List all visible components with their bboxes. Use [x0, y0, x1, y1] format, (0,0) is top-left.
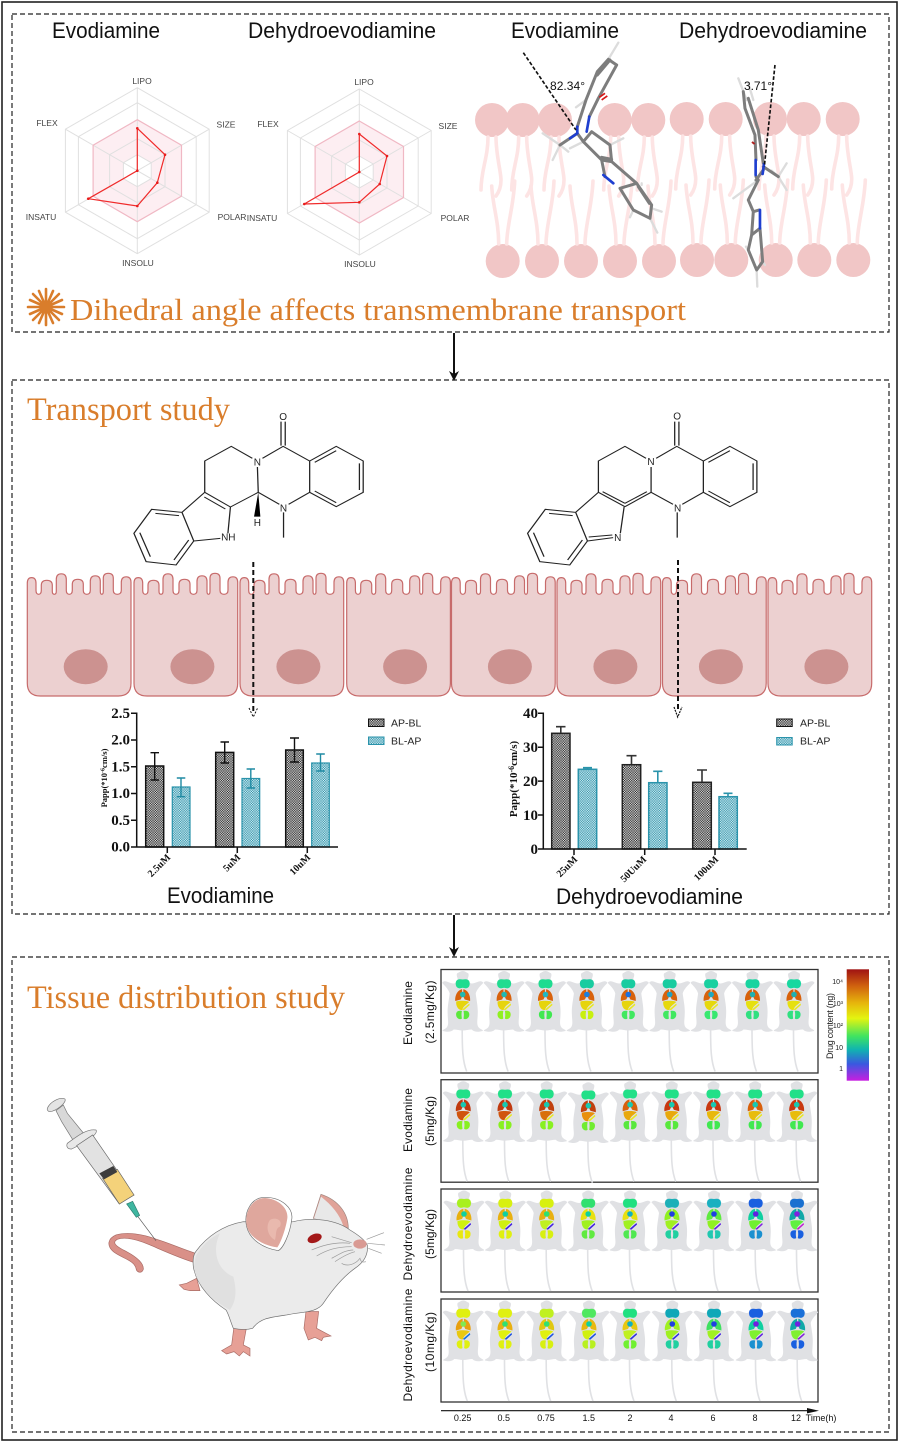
mice: [444, 1190, 817, 1291]
bar chart: Dehydroevodiamine: 40: [523, 706, 538, 722]
row label: Dehydroevodiamine: [401, 1288, 415, 1402]
bar chart: Evodiamine: 5uM: [221, 852, 244, 874]
icon: orange starburst: [28, 289, 64, 325]
time axis: 6: [710, 1413, 716, 1423]
bar chart: Evodiamine: -6: [100, 768, 106, 773]
needle: [138, 1217, 156, 1241]
row: Dehydroevodiamine 5 mg/kg: [401, 1167, 818, 1292]
illustration: syringe injecting mouse: [47, 1098, 385, 1356]
whiskers and mouth: [312, 1233, 385, 1265]
row label: Dehydroevodiamine: [401, 1167, 415, 1280]
3D molecule: Evodiamine: [523, 43, 662, 233]
radar labels: Dehydroevodiamine: SIZE: [439, 121, 458, 131]
caption: dihedral angle: Dihedral angle affects transmembrane transport: [70, 292, 686, 327]
time axis: Time(h): [806, 1413, 836, 1423]
tail: [109, 1233, 196, 1272]
radar labels: Evodiamine: INSOLU: [122, 258, 154, 268]
time axis: [441, 1408, 836, 1423]
bar chart: Evodiamine: 0.0: [111, 840, 130, 856]
bar chart: Dehydroevodiamine: 0: [530, 842, 538, 858]
bar chart: Dehydroevodiamine: 50UuM: [619, 854, 650, 885]
chemical structure: Evodiamine: N: [280, 504, 287, 514]
row frame: [441, 1189, 818, 1292]
arrow: Dehydroevodiamine permeation: [674, 560, 682, 717]
chemical structure: Dehydroevodiamine: N: [647, 457, 655, 468]
bar chart: Evodiamine: 10uM: [288, 852, 314, 878]
bar chart: Dehydroevodiamine: -6: [507, 766, 516, 773]
panel border: [12, 380, 889, 914]
time axis: 0.5: [497, 1413, 510, 1423]
legend: Evodiamine chart: [368, 718, 422, 748]
syringe barrel: [77, 1135, 134, 1204]
radar labels: Dehydroevodiamine: FLEX: [257, 119, 279, 129]
colour scale: 10: [835, 1045, 843, 1052]
bar chart: Evodiamine: 2.5: [111, 706, 130, 722]
bar chart: Dehydroevodiamine: cm/s): [508, 740, 520, 766]
eye: [306, 1232, 323, 1245]
radar chart: Dehydroevodiamine: [287, 89, 431, 255]
arrow: Evodiamine permeation: [249, 562, 258, 717]
bar chart: Dehydroevodiamine: Papp(*10: [508, 773, 520, 817]
far ear: [313, 1194, 348, 1228]
row label: [401, 1088, 437, 1152]
colour scale: 1: [839, 1066, 843, 1073]
row label: [401, 980, 437, 1045]
colour scale: 10⁴: [832, 979, 843, 986]
row label: Evodiamine: [401, 1088, 415, 1152]
radar labels: Evodiamine: LIPO: [132, 76, 152, 86]
bar chart: Evodiamine: Papp(*10: [99, 773, 109, 807]
angle label: 82.34°: 82.34°: [550, 79, 585, 93]
row label: (5mg/Kg): [423, 1096, 437, 1146]
legend: Dehydroevodiamine chart: AP-BL: [800, 718, 831, 730]
bar chart: Dehydroevodiamine: [507, 706, 747, 885]
radar labels: Dehydroevodiamine: INSOLU: [344, 259, 376, 269]
mice: [443, 1300, 818, 1401]
needle hub: [127, 1201, 140, 1217]
syringe seal: [99, 1166, 117, 1179]
bar chart: Evodiamine: 2.0: [111, 733, 130, 749]
bar chart: Dehydroevodiamine: 25uM: [555, 854, 581, 880]
bar chart: Dehydroevodiamine: 10: [523, 808, 538, 824]
nose: [353, 1239, 367, 1249]
heading: Evodiamine membrane: Evodiamine: [511, 18, 619, 43]
colour scale: 10²: [833, 1023, 844, 1030]
heading: Transport study: Transport study: [27, 392, 230, 428]
row label: (2.5mg/Kg): [423, 980, 437, 1044]
heading: Tissue distribution study: Tissue distribution study: [27, 980, 345, 1016]
panel border: [12, 14, 889, 332]
legend: Evodiamine chart: BL-AP: [391, 736, 421, 748]
near ear: [246, 1197, 292, 1251]
time axis: 0.75: [537, 1413, 555, 1423]
radar labels: Evodiamine: SIZE: [217, 120, 236, 130]
lipid bilayer: [475, 102, 870, 278]
mice: [442, 971, 814, 1072]
radar labels: Evodiamine: INSATU: [26, 212, 56, 222]
radar labels: Dehydroevodiamine: LIPO: [354, 77, 374, 87]
colour scale: Drug content (ng): [825, 993, 835, 1059]
radar labels: Dehydroevodiamine: POLAR: [441, 213, 469, 223]
chemical structure: Dehydroevodiamine: N: [614, 533, 621, 544]
chemical structure: Evodiamine: NH: [221, 532, 236, 544]
epithelial cell layer: [27, 573, 872, 696]
colour scale: [825, 969, 869, 1081]
bar chart: Evodiamine: 2.5uM: [146, 852, 174, 880]
panel: transport study: [12, 380, 889, 914]
row label: (10mg/Kg): [423, 1312, 437, 1372]
time axis: 2: [627, 1413, 633, 1423]
panel: tissue distribution study: [12, 957, 889, 1432]
legend: Dehydroevodiamine chart: BL-AP: [800, 736, 830, 748]
bar chart: Dehydroevodiamine: 30: [523, 740, 538, 756]
heading: Dehydroevodiamine radar: Dehydroevodiamine: [248, 18, 436, 43]
front legs: [222, 1312, 331, 1356]
radar labels: Dehydroevodiamine: [247, 77, 469, 269]
chemical structure: Dehydroevodiamine: [528, 412, 757, 565]
row frame: [441, 1299, 818, 1402]
arrow: panel 2 to panel 3: [449, 915, 459, 957]
bar chart: Evodiamine: 0.5: [111, 813, 130, 829]
bar chart: Evodiamine: cm/s): [99, 748, 109, 768]
row label: (5mg/Kg): [423, 1209, 437, 1259]
row frame: [441, 970, 818, 1073]
heading: Dehydroevodiamine membrane: Dehydroevodiamine: [679, 18, 867, 43]
row: Dehydroevodiamine 10 mg/kg: [401, 1288, 818, 1402]
time axis: 12: [791, 1413, 801, 1423]
radar chart: Evodiamine: [65, 88, 209, 254]
row label: Evodiamine: [401, 981, 415, 1045]
syringe plunger: [56, 1105, 85, 1143]
row: Evodiamine 2.5 mg/kg: [401, 970, 818, 1073]
chemical structure: Evodiamine: H: [254, 518, 261, 529]
bar chart: Dehydroevodiamine: 100uM: [692, 854, 722, 883]
time axis: 8: [752, 1413, 758, 1423]
body shade: [194, 1233, 236, 1310]
panel: dihedral angle: [12, 14, 889, 332]
chemical structure: Evodiamine: [134, 412, 363, 565]
time axis: 4: [668, 1413, 674, 1423]
radar labels: Evodiamine: FLEX: [36, 118, 58, 128]
row label: [401, 1167, 437, 1280]
radar labels: Evodiamine: POLAR: [218, 212, 246, 222]
3D molecule: Dehydroevodiamine: [733, 65, 787, 287]
radar labels: Dehydroevodiamine: INSATU: [247, 213, 277, 223]
legend: Evodiamine chart: AP-BL: [391, 718, 422, 730]
row label: [401, 1288, 437, 1402]
syringe liquid: [103, 1169, 134, 1204]
bar chart: Evodiamine: 1.5: [111, 760, 130, 776]
radar labels: Evodiamine: [26, 76, 246, 268]
angle label: 3.71°: 3.71°: [744, 79, 772, 93]
hind foot: [179, 1278, 200, 1291]
chart title: Dehydroevodiamine: Dehydroevodiamine: [556, 884, 743, 909]
row: Evodiamine 5 mg/kg: [401, 1080, 818, 1183]
chemical structure: Evodiamine: N: [254, 458, 261, 468]
bar chart: Evodiamine: 1.0: [111, 786, 130, 802]
bar chart: Evodiamine: [99, 706, 338, 880]
colour scale: 10³: [833, 1001, 844, 1008]
panel border: [12, 957, 889, 1432]
mice: [443, 1081, 817, 1183]
row frame: [441, 1080, 818, 1182]
arrow: panel 1 to panel 2: [449, 333, 459, 381]
body: [193, 1219, 367, 1329]
heading: Evodiamine radar: Evodiamine: [52, 18, 160, 43]
chemical structure: Dehydroevodiamine: O: [673, 412, 681, 422]
bar chart: Dehydroevodiamine: 20: [523, 774, 538, 790]
time axis: 1.5: [582, 1413, 595, 1423]
chemical structure: Evodiamine: O: [279, 412, 287, 423]
time axis: 0.25: [454, 1413, 471, 1423]
legend: Dehydroevodiamine chart: [777, 718, 831, 748]
chart title: Evodiamine: Evodiamine: [167, 883, 274, 908]
chemical structure: Dehydroevodiamine: N: [674, 504, 681, 514]
